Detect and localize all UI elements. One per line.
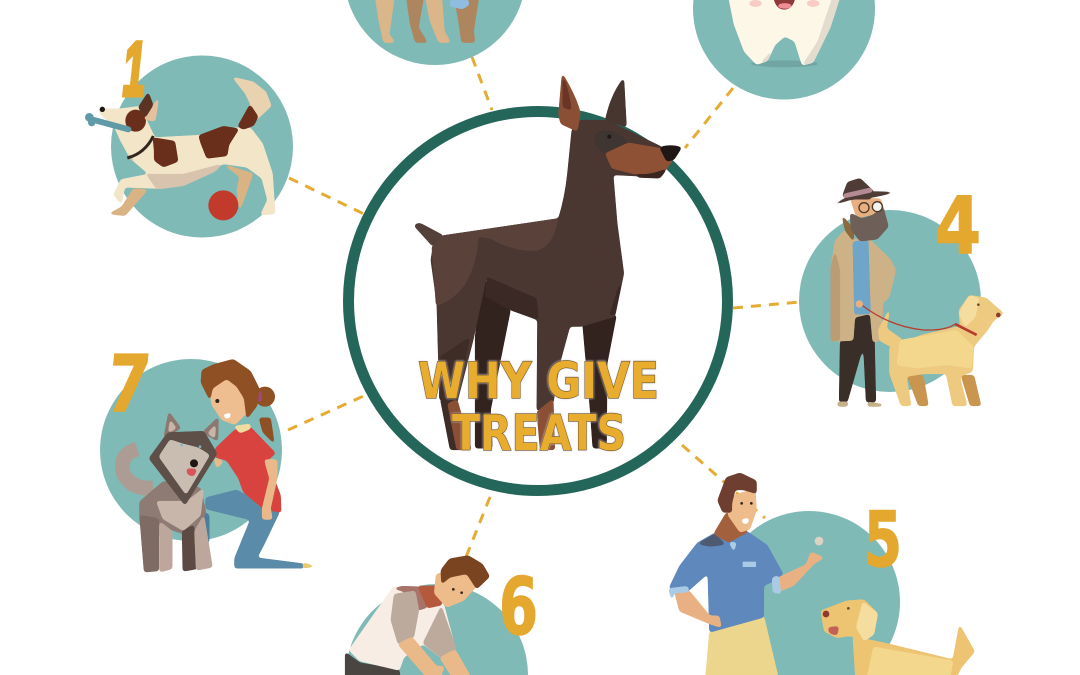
illustration: man bending down (345, 555, 490, 675)
panel: circle 4 (799, 210, 981, 392)
illustration: doberman (414, 73, 682, 450)
panel: circle 6 (346, 584, 528, 675)
illustration: man walking golden dog (827, 178, 1004, 407)
number 4: 4 (935, 182, 981, 272)
illustration: man tossing treat to dog (668, 473, 975, 675)
title (418, 352, 659, 462)
number 5: 5 (864, 495, 902, 584)
panel: circle 3 (693, 0, 875, 100)
panel: circle 1 (111, 56, 293, 238)
number 7: 7 (103, 339, 154, 430)
panel: circle 2 (348, 0, 522, 65)
title: WHY GIVE (418, 352, 659, 410)
central ring (348, 112, 728, 490)
panel: circle 5 (718, 511, 900, 675)
illustration: woman with husky (122, 359, 317, 572)
number 6: 6 (499, 563, 538, 653)
illustration: partial dog top (374, 0, 480, 43)
title: TREATS (452, 405, 626, 462)
number 1: 1 (119, 27, 150, 112)
illustration: running dog with bone and ball (85, 77, 275, 220)
panel: circle 7 (100, 359, 282, 541)
illustration: tooth (728, 0, 841, 67)
